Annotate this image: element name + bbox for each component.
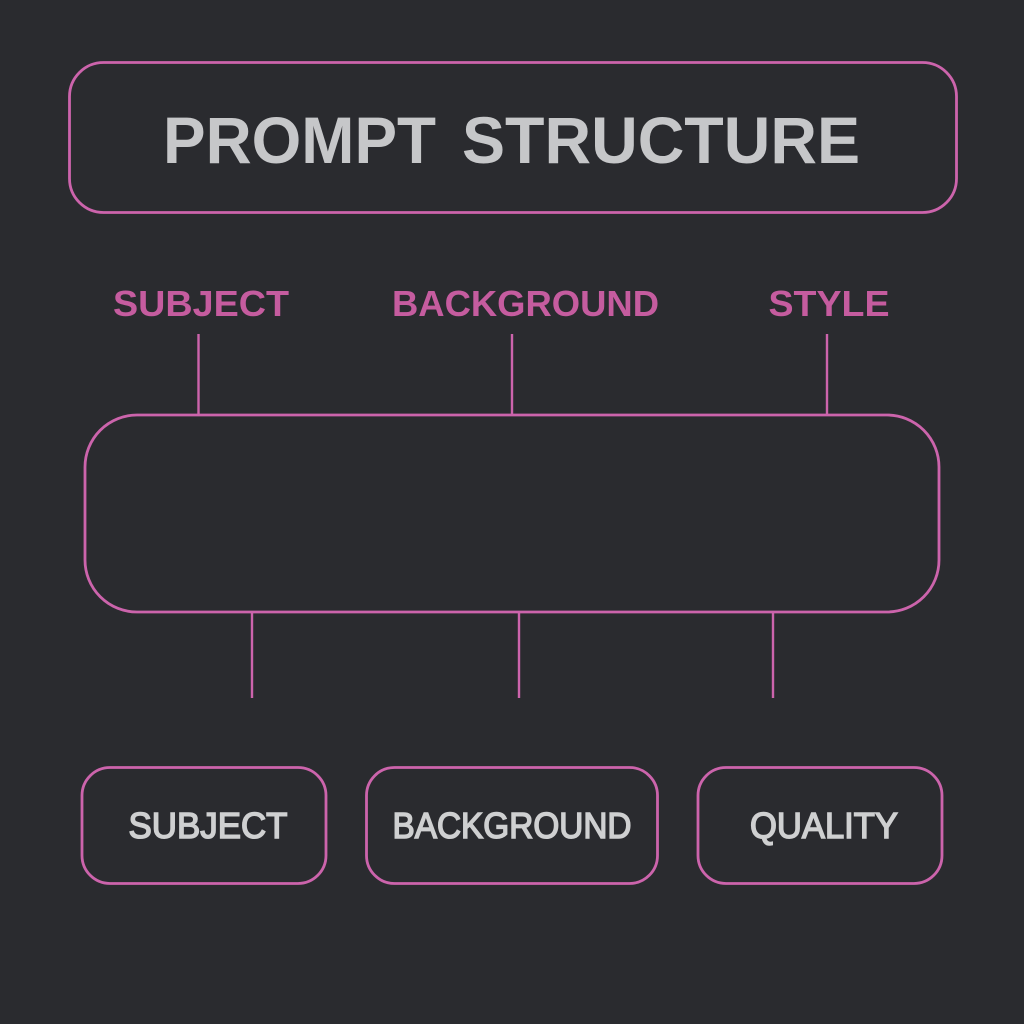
central box [85, 415, 939, 612]
title: PROMPT [163, 103, 436, 177]
title: STRUCTURE [462, 103, 860, 177]
bottom box: quality [698, 768, 942, 884]
connector lines below central box [252, 612, 773, 698]
bottom box: subject [82, 768, 326, 884]
top label: style: STYLE [768, 283, 890, 324]
bottom box: background: BACKGROUND [392, 805, 632, 846]
title [163, 103, 860, 177]
bottom box: background [366, 768, 658, 884]
connector lines above central box [198, 334, 827, 415]
top label: subject: SUBJECT [113, 283, 289, 324]
bottom box: subject: SUBJECT [128, 805, 288, 846]
top label: background: BACKGROUND [392, 283, 659, 324]
title box [70, 62, 956, 212]
bottom box: quality: QUALITY [750, 805, 898, 846]
